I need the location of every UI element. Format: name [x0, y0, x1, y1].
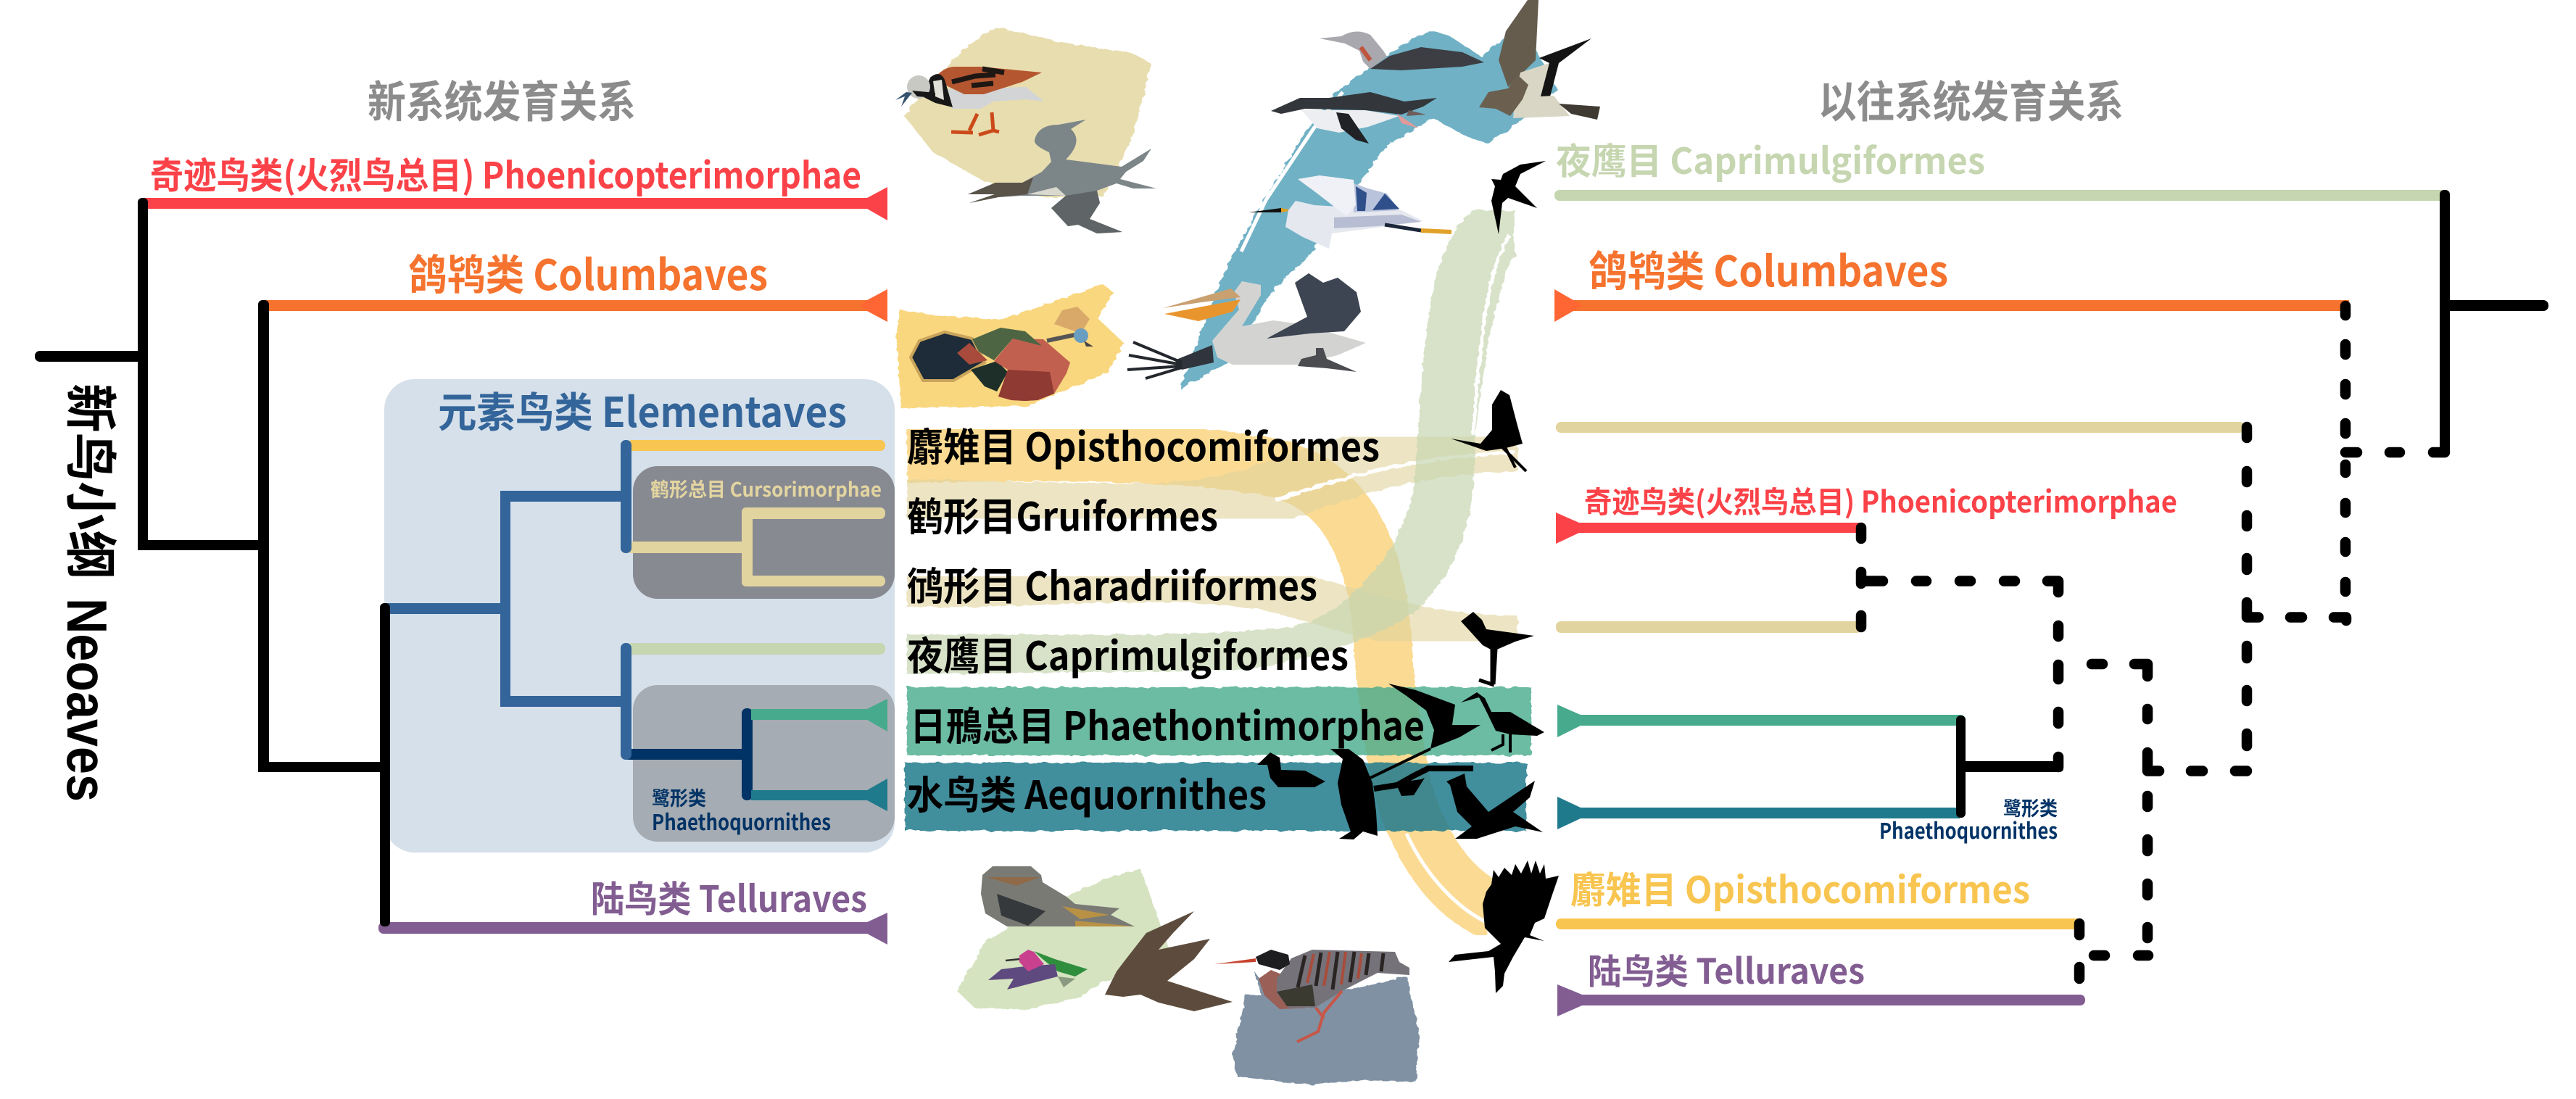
- icon: swift: [1105, 911, 1233, 1011]
- label: Phoenicopterimorphae: 奇迹鸟类(火烈鸟总目) Phoenicopterimorphae: [150, 147, 861, 199]
- branch: Caprimulgiformes: [1554, 190, 2446, 201]
- panel: Aequornithes illustrations: [1127, 0, 1600, 389]
- label: Neoaves vertical: Neoaves: [55, 598, 119, 802]
- panel: hoatzin illustration patch: [896, 284, 1124, 408]
- branch: Phaethoquornithes: [627, 708, 753, 800]
- icon: tropicbird silhouette: [1370, 684, 1480, 778]
- label: Caprimulgiformes: 夜鹰目 Caprimulgiformes: [1556, 133, 1985, 185]
- label: Charadriiformes: 鸻形目 Charadriiformes: [907, 555, 1317, 612]
- branch: Aequornithes: [1557, 797, 1960, 829]
- branches: black backbone: [35, 198, 390, 926]
- ribbon: Caprimulgiformes green: [907, 210, 1515, 674]
- ribbon: Charadriiformes beige: [907, 579, 1517, 638]
- branch: Opisthocomiformes: [1556, 918, 2082, 929]
- branch: Phoenicopterimorphae: [1556, 513, 1860, 544]
- branch: Telluraves: [378, 913, 887, 945]
- branch: Gruiformes and Charadriiformes upper: [1556, 422, 2245, 433]
- icon: plover silhouette: [1461, 612, 1534, 684]
- ribbon: Phaethontimorphae band: [907, 687, 1531, 755]
- icon: hummingbird: [988, 950, 1088, 990]
- icon: potoo: [981, 866, 1135, 926]
- label: Phaethoquornithes: [1879, 793, 2058, 845]
- icon: grebe silhouette: [1257, 752, 1325, 787]
- label: Phaethoquornithes: Phaethoquornithes: [652, 805, 831, 837]
- icon: crane silhouette: [1451, 390, 1526, 471]
- label: Phaethontimorphae: 日鳽总目 Phaethontimorphae: [910, 694, 1425, 752]
- panel: Charadriiformes/Gruiformes illustration patch: [895, 27, 1156, 233]
- ribbon: Opisthocomiformes stripe: [1407, 834, 1486, 922]
- label: Phaethoquornithes: [652, 783, 831, 837]
- panel: black silhouettes: [1257, 161, 1559, 993]
- text block: central taxon labels: [907, 415, 1425, 821]
- label: Neoaves vertical: 新鸟小纲: [57, 383, 133, 579]
- branch: Telluraves: [1557, 984, 2085, 1016]
- branch: Elementaves blue stems: [386, 440, 631, 760]
- icon: red-throated loon: [1320, 31, 1484, 70]
- ribbon: Aequornithes band: [905, 763, 1526, 831]
- label: Columbaves: 鸽鸨类 Columbaves: [1589, 238, 1948, 299]
- label: Elementaves: 元素鸟类 Elementaves: [438, 380, 847, 439]
- panel: Telluraves illustrations: [957, 866, 1419, 1085]
- panel: right tree, previous phylogeny: [1554, 133, 2548, 1016]
- icon: penguin silhouette: [1330, 749, 1378, 839]
- panel: left tree, new phylogeny: [35, 147, 895, 945]
- panel: Cursorimorphae box: [633, 466, 895, 599]
- branch: Phaethontimorphae: [751, 699, 887, 731]
- label: Telluraves: 陆鸟类 Telluraves: [591, 871, 867, 923]
- label: Aequornithes: 水鸟类 Aequornithes: [907, 763, 1267, 821]
- label: Caprimulgiformes: 夜鹰目 Caprimulgiformes: [907, 624, 1349, 681]
- patch: beige brush: [904, 27, 1151, 198]
- icon: swift silhouette: [1491, 161, 1546, 234]
- icon: swimming penguin: [1271, 92, 1437, 144]
- patch: green brush: [957, 868, 1169, 1010]
- branch: Caprimulgiformes: [627, 643, 885, 655]
- panel: Phaethoquornithes box: [633, 685, 895, 842]
- label: Phaethoquornithes: Phaethoquornithes: [1879, 813, 2058, 845]
- icon: hoatzin: [911, 307, 1093, 401]
- icon: snowy egret: [1248, 175, 1451, 249]
- ribbon: Gruiformes beige: [907, 441, 1517, 515]
- branch: Phaethontimorphae: [1557, 705, 1966, 737]
- label: Phaethoquornithes: 鹭形类: [2003, 793, 2058, 821]
- label: Cursorimorphae: 鹤形总目 Cursorimorphae: [650, 474, 882, 502]
- branch: Phoenicopterimorphae: [144, 187, 887, 220]
- label: Columbaves: 鸽鸨类 Columbaves: [408, 241, 768, 302]
- icon: sunbittern silhouette: [1461, 692, 1544, 752]
- icon: hoatzin silhouette: [1449, 860, 1559, 993]
- label: Neoaves vertical: [55, 383, 133, 802]
- branch: Columbaves: [1554, 289, 2349, 322]
- label: Telluraves: 陆鸟类 Telluraves: [1588, 943, 1865, 994]
- heading: new phylogeny: 新系统发育关系: [368, 67, 636, 130]
- branch: Opisthocomiformes: [627, 440, 885, 451]
- icon: small bird silhouette: [1374, 768, 1473, 796]
- panel: central brush ribbons: [905, 210, 1531, 922]
- branches: uncertain dashed links: [1861, 306, 2445, 979]
- icon: diving auk: [968, 120, 1156, 233]
- icon: sunbittern: [1214, 950, 1409, 1042]
- panel: Elementaves background: [384, 379, 895, 853]
- icon: pelican silhouette: [1446, 774, 1543, 839]
- patch: yellow brush: [896, 284, 1124, 408]
- branches: solid black: [1956, 190, 2548, 818]
- icon: dalmatian pelican: [1127, 273, 1366, 378]
- label: Phoenicopterimorphae: 奇迹鸟类(火烈鸟总目) Phoenicopterimorphae: [1584, 478, 2177, 521]
- heading: previous phylogeny: 以往系统发育关系: [1818, 67, 2124, 130]
- branch: Columbaves: [262, 289, 887, 322]
- patch: blue brush: [1180, 31, 1557, 389]
- stripe: white brush line: [1241, 92, 1343, 252]
- label: Gruiformes: 鹤形目Gruiformes: [907, 485, 1218, 542]
- patch: grey brush: [1233, 971, 1419, 1085]
- branch: Aequornithes: [751, 779, 887, 811]
- branch: Cursorimorphae: [629, 507, 885, 586]
- branch: Charadriiformes lower: [1556, 621, 1862, 633]
- label: Phaethoquornithes: 鹭形类: [652, 783, 706, 811]
- label: Opisthocomiformes: 麝雉目 Opisthocomiformes: [907, 415, 1380, 473]
- label: Opisthocomiformes: 麝雉目 Opisthocomiformes: [1570, 860, 2030, 914]
- icon: storm petrel: [1479, 0, 1600, 120]
- icon: ruddy turnstone: [895, 67, 1044, 135]
- ribbon: Opisthocomiformes yellow: [907, 452, 1495, 912]
